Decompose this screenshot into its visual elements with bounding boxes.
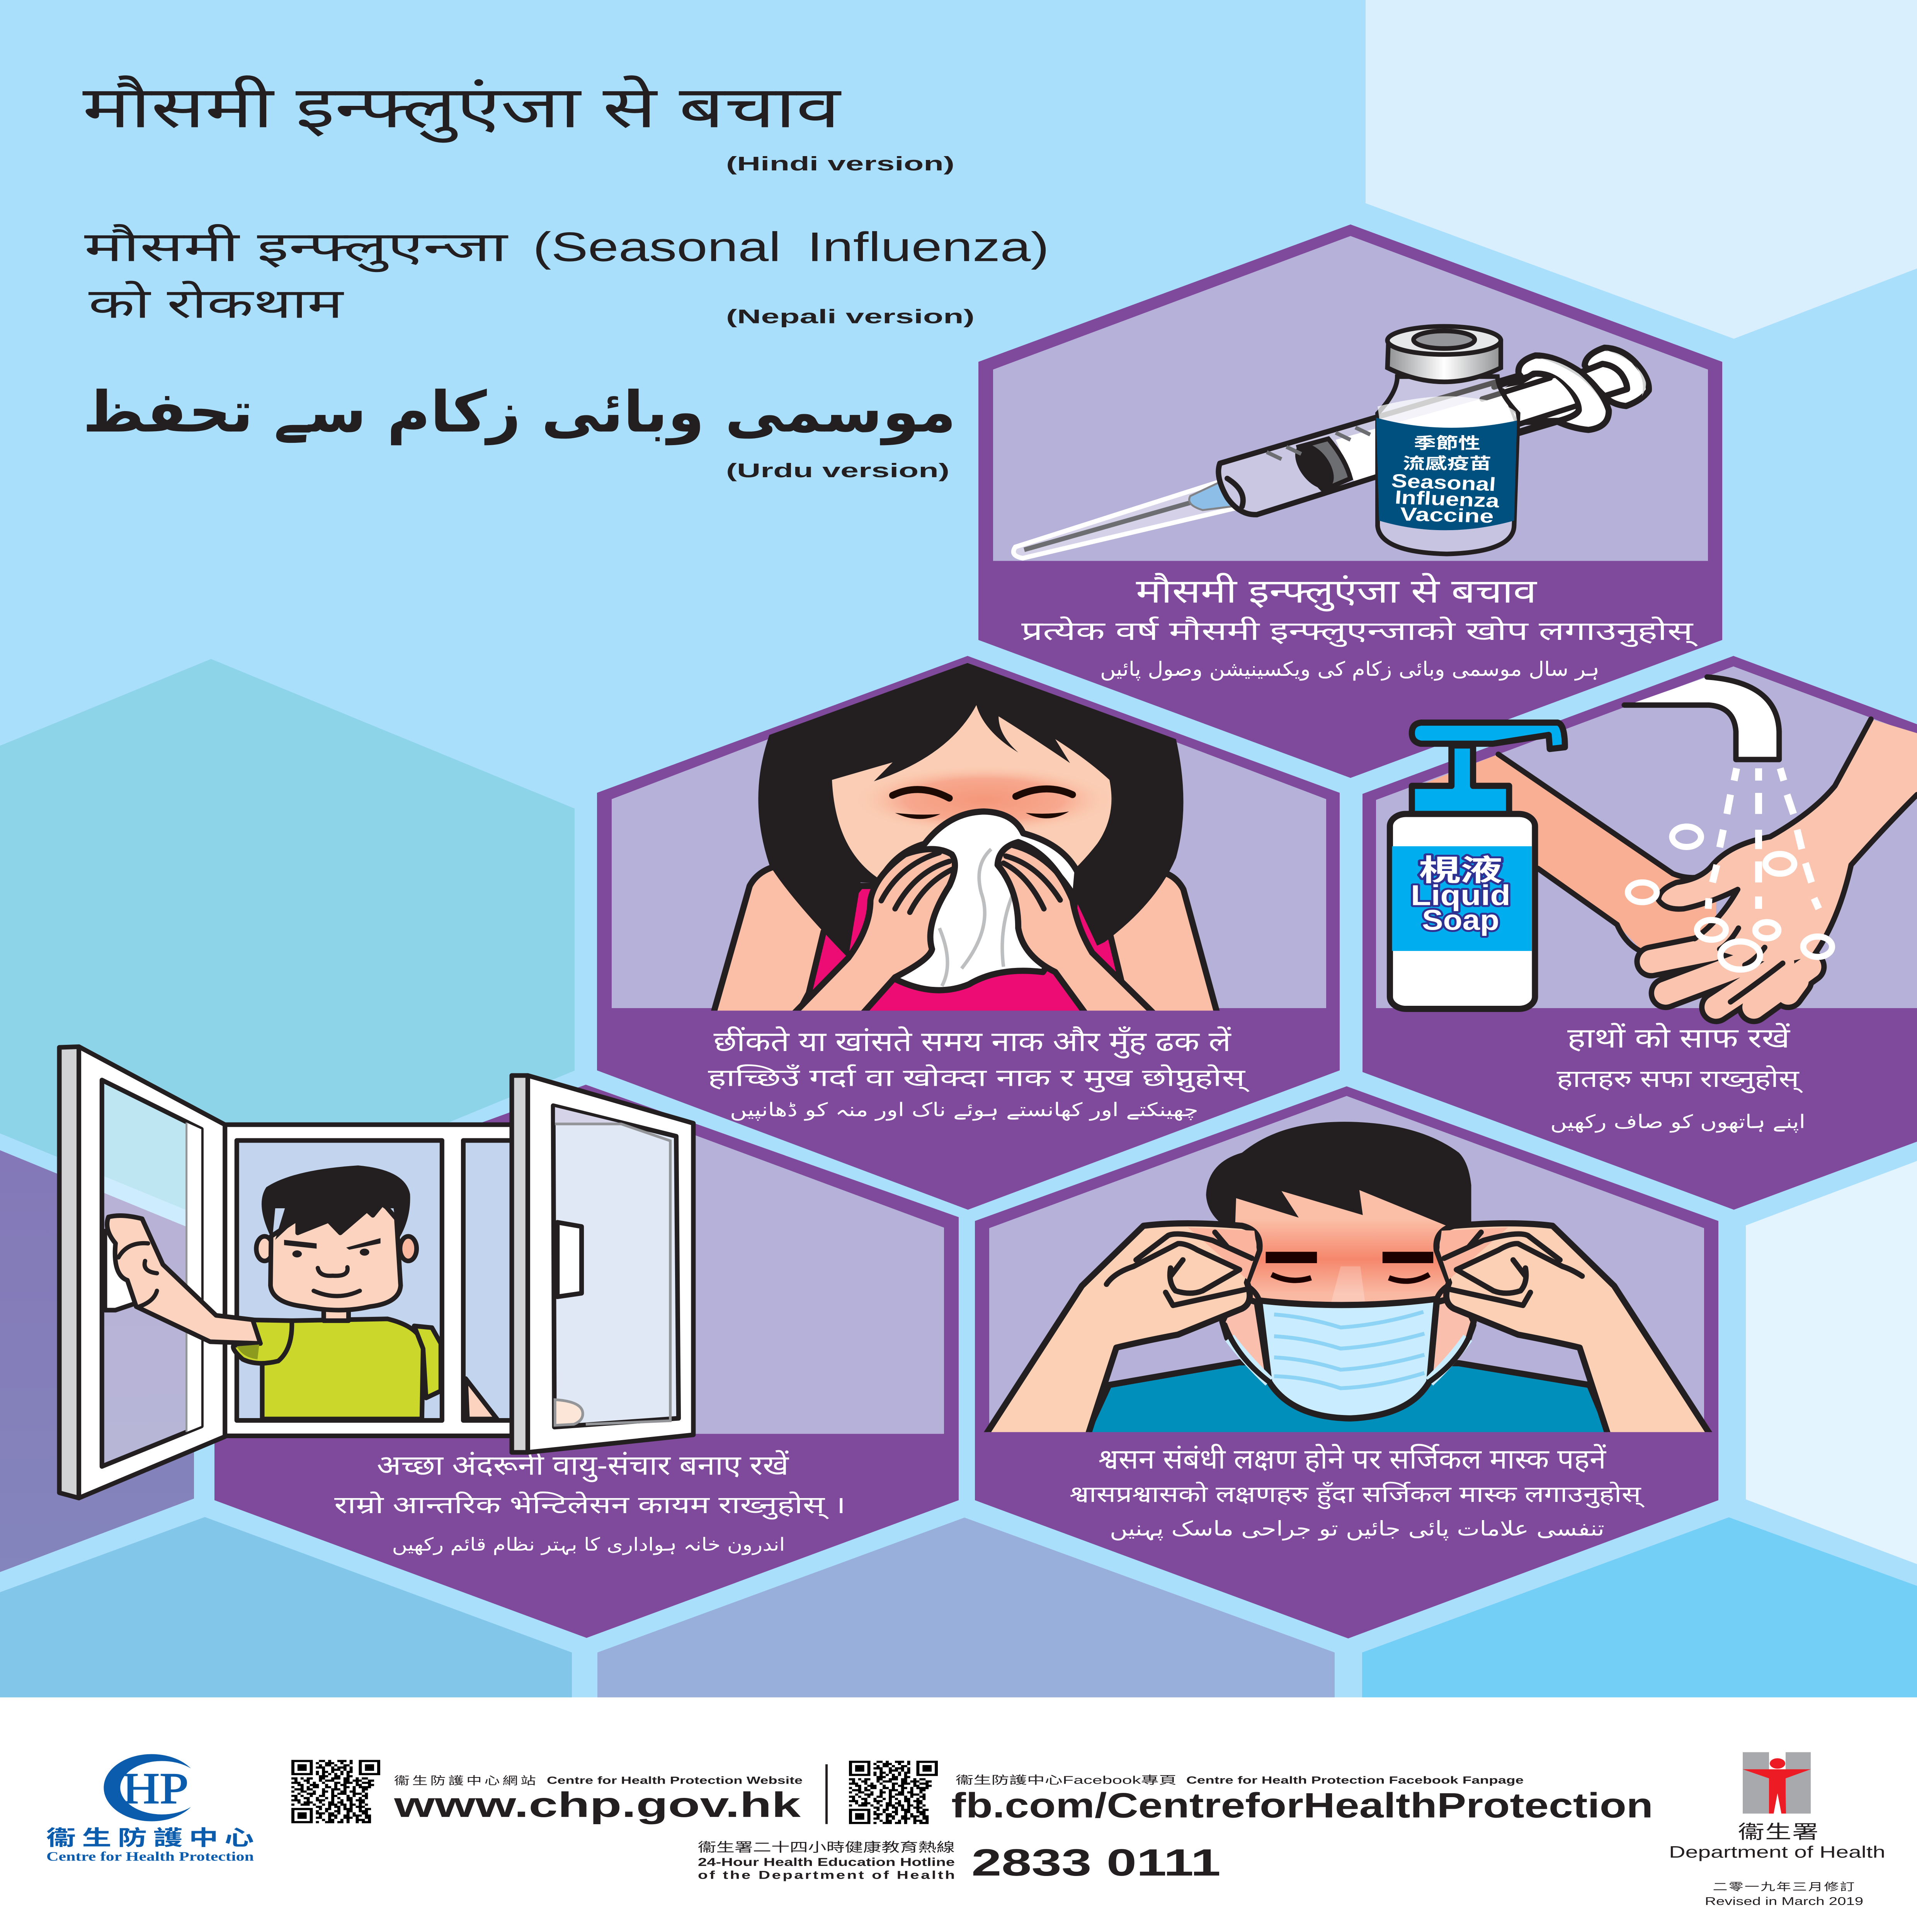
illustration: girl sneezing into tissue (713, 663, 1218, 1016)
hotline: 2833 0111 (971, 1842, 1221, 1884)
soap label text: Liquid (1411, 879, 1510, 912)
revision note: 二零一九年三月修訂 (1713, 1881, 1854, 1893)
window panes (237, 1141, 442, 1420)
vial body (1378, 377, 1518, 554)
soap label text (1411, 854, 1510, 936)
right window sash (528, 1075, 693, 1452)
brows and eyes (893, 789, 1073, 798)
brows and eyes (1266, 1252, 1433, 1263)
caption: indoor ventilation: अच्छा अंदरूनी वायु-संचार बनाए रखें (377, 1450, 789, 1482)
title: Nepali (84, 224, 1049, 327)
revision note: Revised in March 2019 (1705, 1896, 1863, 1908)
window handle (105, 1230, 136, 1310)
background hexagon: top right (1366, 0, 1917, 339)
panel: clean hands (1362, 656, 1917, 1210)
Department of Health name: Department of Health (1669, 1843, 1885, 1861)
left window sash (79, 1047, 225, 1498)
vial cap (1388, 342, 1501, 382)
face (1232, 1190, 1447, 1305)
soap bottle (1390, 814, 1535, 1009)
caption: surgical mask: श्वासप्रश्वासको लक्षणहरु हुँदा सर्जिकल मास्क लगाउनुहोस् (1070, 1481, 1645, 1509)
hotline: 衞生署二十四小時健康教育熱線 (698, 1840, 955, 1854)
caption: vaccination: प्रत्येक वर्ष मौसमी इन्फ्लुएन्जाको खोप लगाउनुहोस् (1021, 616, 1698, 647)
title: Hindi: मौसमी इन्फ्लुएंजा से बचाव (82, 75, 841, 143)
website labels: Centre for Health Protection Website (547, 1774, 803, 1786)
near hand (1658, 719, 1917, 963)
Facebook labels: 衞生防護中心Facebook專頁 (956, 1774, 1177, 1786)
left hand (791, 849, 955, 1016)
panel frame (214, 1085, 959, 1638)
panel frame (1362, 656, 1917, 1210)
blush (853, 765, 1114, 835)
face (832, 705, 1111, 889)
title: Nepali: मौसमी इन्फ्लुएन्जा (84, 224, 509, 272)
man: right arm (466, 1379, 497, 1419)
shirt (1084, 1362, 1612, 1439)
footer background (0, 1697, 1917, 1932)
footer (0, 1697, 1917, 1932)
illustration: soap and washing hands (1390, 677, 1917, 1009)
caption: cover nose and mouth: چھینکتے اور کھانستے ہوئے ناک اور منہ کو ڈھانپیں (730, 1099, 1198, 1121)
caption: clean hands (1550, 1023, 1805, 1133)
syringe barrel (1218, 377, 1577, 515)
man: ears (256, 1236, 273, 1261)
caption: vaccination (1021, 573, 1698, 681)
QR code: website (291, 1760, 380, 1823)
reflected hand (555, 1400, 583, 1425)
caption: indoor ventilation: राम्रो आन्तरिक भेन्टिलेसन कायम राख्नुहोस् । (334, 1491, 846, 1520)
right hand (998, 842, 1156, 1016)
faucet (1624, 677, 1779, 760)
language tag: Hindi: (Hindi version) (726, 153, 954, 175)
panel frame (597, 656, 1340, 1210)
background hexagon: bottom centre (597, 1517, 1335, 1697)
logo Chinese name: 衞生防護中心 (46, 1826, 254, 1849)
soap label text: 梘液 (1419, 854, 1502, 887)
fingers (1651, 949, 1810, 1007)
logo: Department of Health (1743, 1752, 1811, 1814)
background hexagon: bottom left (0, 1517, 572, 1697)
shoulders (713, 867, 1218, 1016)
cheeks (1222, 1296, 1474, 1382)
syringe needle cover (1014, 480, 1242, 558)
QR code: Facebook (849, 1761, 938, 1824)
language tag: Nepali: (Nepali version) (726, 306, 975, 328)
syringe flange and plunger (1482, 348, 1649, 434)
background hexagon: left teal (0, 659, 575, 1220)
title: Nepali: (Seasonal Influenza) (533, 224, 1049, 270)
caption: clean hands: हाथों को साफ रखें (1567, 1023, 1791, 1054)
panel inner (1376, 667, 1917, 1008)
language tag: Urdu: (Urdu version) (726, 459, 949, 482)
title: Urdu: موسمی وبائی زکام سے تحفظ (83, 379, 956, 446)
far arm (1414, 754, 1716, 953)
window pane handle (557, 1222, 582, 1297)
caption: clean hands: हातहरु सफा राख्नुहोस् (1556, 1065, 1803, 1094)
vial label text: Seasonal (1391, 470, 1497, 495)
hair (758, 663, 1183, 958)
panel frame (975, 1086, 1718, 1638)
mask folds (1274, 1312, 1424, 1388)
man: face (270, 1203, 401, 1310)
water jets (1708, 768, 1819, 909)
right arm and hand (1436, 1223, 1713, 1439)
illustration: vaccine and syringe (1014, 327, 1649, 558)
title: Nepali: को रोकथाम (88, 281, 344, 327)
caption: indoor ventilation: اندرون خانہ ہواداری کا بہتر نظام قائم رکھیں (392, 1534, 785, 1555)
man: left arm and hand (107, 1216, 260, 1344)
caption: surgical mask: श्वसन संबंधी लक्षण होने पर सर्जिकल मास्क पहनें (1098, 1444, 1607, 1475)
window frame (225, 1125, 518, 1436)
caption: surgical mask (1070, 1444, 1645, 1541)
soap bubbles (1628, 827, 1832, 969)
pink top (796, 886, 1146, 1016)
hair (1206, 1122, 1471, 1231)
Facebook labels: Centre for Health Protection Facebook Fanpage (1186, 1774, 1524, 1786)
man: neck (324, 1308, 349, 1321)
vial label text: Influenza (1394, 486, 1500, 512)
logo letters: HP (122, 1764, 189, 1813)
man: hair (262, 1165, 410, 1240)
hotline (698, 1840, 1221, 1884)
vial label text: Vaccine (1400, 503, 1494, 527)
panel frame (978, 224, 1722, 778)
left arm and hand (983, 1223, 1260, 1439)
background hexagon: right pale (1746, 1161, 1917, 1564)
website labels: 衞生防護中心網站 (394, 1775, 536, 1787)
divider (825, 1764, 828, 1824)
Department of Health name: 衞生署 (1738, 1821, 1818, 1842)
panel: indoor ventilation (214, 1085, 959, 1638)
mask (1259, 1299, 1437, 1418)
vial label text: 季節性 (1414, 434, 1480, 452)
Department of Health name (1669, 1821, 1885, 1861)
logo: Centre for Health Protection (46, 1754, 254, 1864)
caption: cover nose and mouth: छींकते या खांसते समय नाक और मुँह ढक लें (713, 1026, 1232, 1058)
panel: cover nose and mouth (597, 656, 1340, 1210)
left window pane (102, 1080, 201, 1466)
background hexagon: left purple (0, 1150, 194, 1572)
caption: cover nose and mouth: हाच्छिउँ गर्दा वा खोक्दा नाक र मुख छोप्नुहोस् (708, 1064, 1250, 1093)
panel inner (228, 1095, 944, 1434)
Facebook labels: fb.com/CentreforHealthProtection (951, 1786, 1653, 1825)
revision note (1705, 1881, 1863, 1908)
vial label text (1391, 434, 1500, 527)
hotline: 24-Hour Health Education Hotline (698, 1855, 955, 1869)
panel inner (993, 236, 1708, 561)
man: sleeve (233, 1320, 292, 1363)
website labels: www.chp.gov.hk (394, 1785, 801, 1825)
caption: cover nose and mouth (708, 1026, 1250, 1121)
caption: surgical mask: تنفسی علامات پائی جائیں تو جراحی ماسک پہنیں (1110, 1517, 1604, 1541)
tissue (885, 811, 1077, 990)
panel inner (989, 1096, 1704, 1432)
panel: surgical mask (975, 1086, 1718, 1638)
caption: indoor ventilation (334, 1450, 846, 1555)
illustration: man opening a window (60, 1047, 693, 1498)
logo ring (104, 1754, 191, 1821)
illustration: man putting on mask (983, 1122, 1713, 1439)
caption: clean hands: اپنے ہاتھوں کو صاف رکھیں (1550, 1111, 1805, 1133)
hotline: of the Department of Health (698, 1868, 955, 1881)
panel inner (612, 663, 1326, 1008)
soap pump (1412, 745, 1509, 814)
soap label text: Soap (1422, 904, 1499, 936)
man: shirt (262, 1319, 423, 1419)
caption: vaccination: मौसमी इन्फ्लुएंजा से बचाव (1136, 573, 1538, 612)
vial label (1376, 418, 1517, 530)
panel: vaccination (978, 224, 1722, 778)
man: brows, eyes, nose and mouth (284, 1238, 381, 1250)
logo English name: Centre for Health Protection (46, 1849, 254, 1864)
vial label text: 流感疫苗 (1403, 455, 1492, 473)
caption: vaccination: ہر سال موسمی وبائی زکام کی ویکسینیشن وصول پائیں (1100, 657, 1599, 681)
background hexagon: bottom right (1362, 1517, 1917, 1697)
